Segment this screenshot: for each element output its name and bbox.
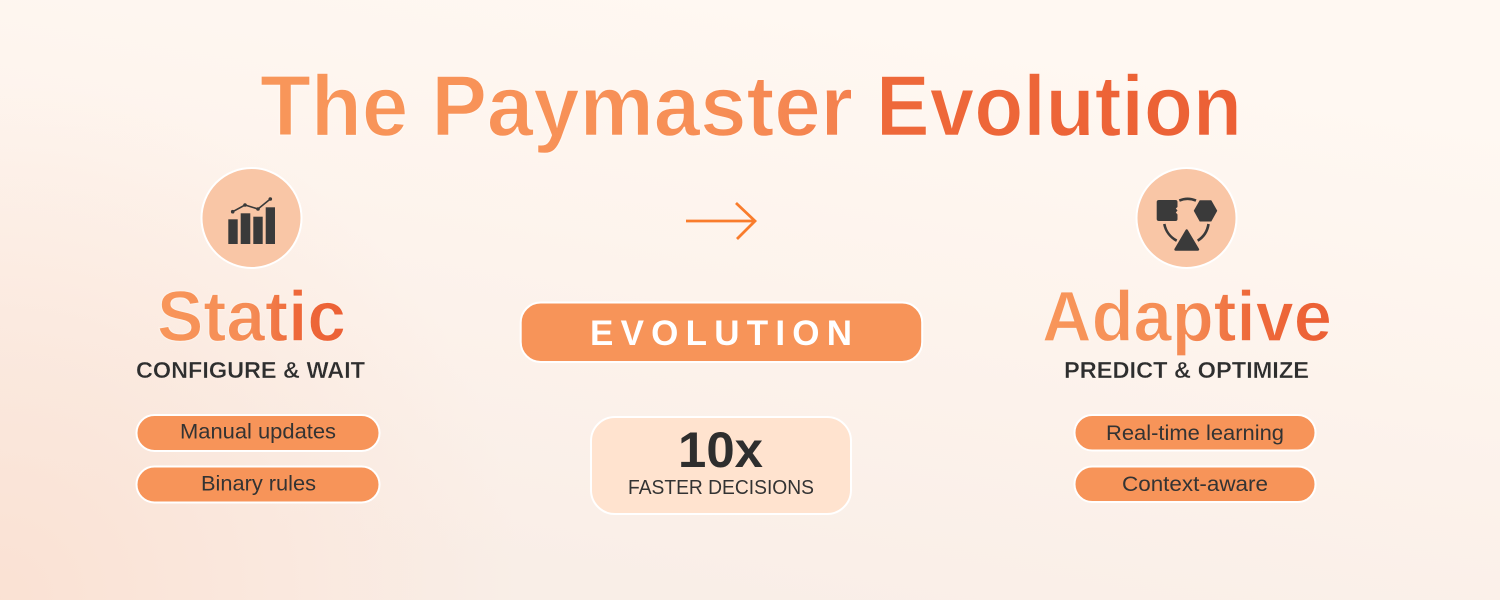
pill: binary rules [136,466,380,502]
heading: Adaptive: Adaptive [1042,278,1332,357]
pill: real-time learning: Real-time learning [1106,421,1284,445]
title [260,58,1242,154]
stat card: 10x faster decisions: 10x [678,422,763,478]
icon: bar chart with trend line [202,168,302,268]
pill: real-time learning [1074,415,1316,450]
stat card: 10x faster decisions: FASTER DECISIONS [628,476,814,499]
panel: static [136,168,380,502]
title: Evolution [876,58,1242,154]
stat card: 10x faster decisions [591,417,851,514]
arrow [686,203,755,239]
panel: adaptive [1042,168,1332,502]
title: The Paymaster [260,58,853,154]
icon: connected shapes [1136,168,1236,268]
badge: evolution [521,302,922,362]
pill: manual updates: Manual updates [180,420,336,444]
panel: centre [521,203,922,514]
pill: context-aware [1074,466,1316,502]
pill: manual updates [136,415,380,451]
subheading: configure and wait: CONFIGURE & WAIT [136,357,366,383]
heading: Static: Static [157,278,346,357]
pill: binary rules: Binary rules [201,472,316,496]
badge: evolution: EVOLUTION [590,314,852,353]
pill: context-aware: Context-aware [1122,472,1268,496]
subheading: predict and optimize: PREDICT & OPTIMIZE [1064,357,1309,383]
